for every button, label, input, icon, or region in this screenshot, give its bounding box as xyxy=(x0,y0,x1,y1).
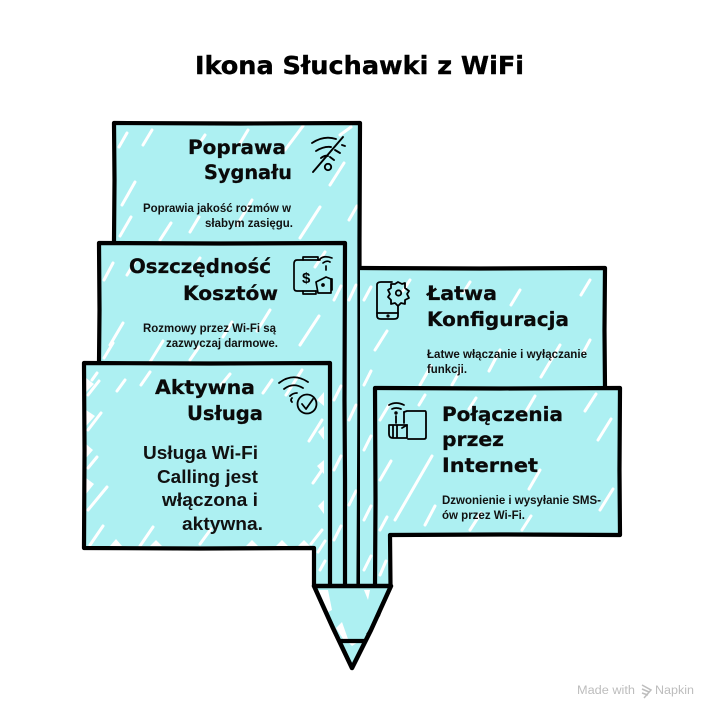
description: Poprawa Sygnału: słabym zasięgu. xyxy=(205,218,293,230)
heading: Oszczędność Kosztów: Oszczędność xyxy=(129,255,271,278)
panel: Oszczędność Kosztów xyxy=(99,243,345,586)
description: Oszczędność Kosztów: Rozmowy przez Wi-Fi są xyxy=(143,323,277,335)
description: Aktywna Usługa: Calling jest xyxy=(157,467,258,487)
panel: Połączenia przez Internet xyxy=(375,388,620,586)
footer: Made with Napkin xyxy=(577,685,694,698)
heading: Połączenia przez Internet xyxy=(442,403,563,477)
description: Łatwa Konfiguracja: funkcji. xyxy=(427,364,467,376)
description: Łatwa Konfiguracja xyxy=(427,349,587,376)
description: Aktywna Usługa: aktywna. xyxy=(182,514,263,534)
description: Oszczędność Kosztów: zazwyczaj darmowe. xyxy=(166,338,278,350)
description: Oszczędność Kosztów xyxy=(143,323,278,350)
heading: Oszczędność Kosztów xyxy=(129,255,278,305)
panel: Łatwa Konfiguracja xyxy=(360,268,605,586)
icon: wifi and hand calling xyxy=(389,403,426,439)
footer: Made with Napkin: Napkin xyxy=(655,685,694,697)
description: Poprawa Sygnału: Poprawia jakość rozmów w xyxy=(143,203,291,215)
description: Aktywna Usługa: włączona i xyxy=(161,490,258,510)
heading: Łatwa Konfiguracja xyxy=(426,282,569,331)
heading: Poprawa Sygnału xyxy=(188,136,292,184)
heading: Łatwa Konfiguracja: Łatwa xyxy=(426,282,497,305)
description: Połączenia przez Internet xyxy=(442,495,601,522)
heading: Połączenia przez Internet: Internet xyxy=(442,454,538,477)
icon: crossed-out wifi xyxy=(312,137,345,172)
heading: Aktywna Usługa xyxy=(155,376,263,425)
description: Połączenia przez Internet: Dzwonienie i wysyłanie SMS- xyxy=(442,495,601,507)
heading: Poprawa Sygnału: Poprawa xyxy=(188,136,286,159)
description: Aktywna Usługa: Usługa Wi-Fi xyxy=(143,443,258,463)
heading: Poprawa Sygnału: Sygnału xyxy=(204,161,292,184)
description: Poprawa Sygnału xyxy=(143,203,293,230)
heading: Oszczędność Kosztów: Kosztów xyxy=(183,282,278,305)
icon: pencil tip xyxy=(314,586,391,668)
panel: Aktywna Usługa xyxy=(84,363,330,586)
footer: Made with Napkin: Made with xyxy=(577,685,635,697)
icon: wifi with check mark xyxy=(279,377,316,414)
heading: Aktywna Usługa: Aktywna xyxy=(155,376,255,399)
icon: phone with gear xyxy=(377,282,409,319)
description: Łatwa Konfiguracja: Łatwe włączanie i wyłączanie xyxy=(427,349,587,361)
description: Aktywna Usługa xyxy=(143,443,263,534)
heading: Aktywna Usługa: Usługa xyxy=(187,402,263,425)
heading: Połączenia przez Internet: przez xyxy=(442,428,504,451)
panel: Poprawa Sygnału xyxy=(114,123,360,586)
description: Połączenia przez Internet: ów przez Wi-Fi. xyxy=(442,510,525,522)
icon: money and wifi lock xyxy=(294,257,332,294)
title: Ikona Słuchawki z WiFi xyxy=(195,51,524,80)
icon: money and wifi lock: $ xyxy=(302,270,311,287)
heading: Połączenia przez Internet: Połączenia xyxy=(442,403,563,426)
heading: Łatwa Konfiguracja: Konfiguracja xyxy=(427,308,569,331)
